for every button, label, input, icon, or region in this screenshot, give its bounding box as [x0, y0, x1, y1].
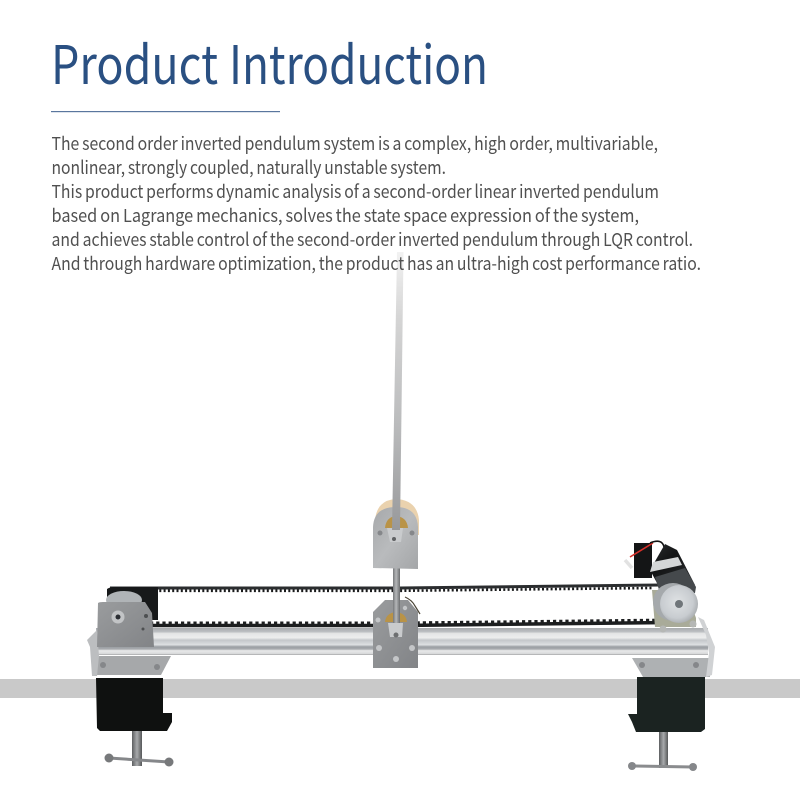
carriage wire	[405, 597, 420, 614]
introduction text block: And through hardware optimization, the product has an ultra-high cost performance ratio.	[52, 250, 701, 276]
introduction text block: This product performs dynamic analysis of a second-order linear inverted pendulum	[52, 178, 659, 204]
right mounting bracket	[632, 658, 710, 677]
rail right end cap	[698, 617, 715, 677]
title: Product	[51, 24, 218, 100]
introduction text block	[52, 130, 701, 276]
rail left end cap	[87, 630, 99, 676]
introduction text block: nonlinear, strongly coupled, naturally unstable system.	[52, 154, 446, 180]
left pulley	[106, 587, 158, 620]
lower belt run	[150, 620, 672, 626]
aluminium rail	[96, 628, 708, 655]
title underline	[51, 111, 280, 112]
upper pendulum rod	[392, 252, 404, 530]
cart carriage plate	[373, 598, 418, 668]
introduction text block: based on Lagrange mechanics, solves the state space expression of the system,	[52, 202, 639, 228]
title	[51, 24, 488, 100]
lower pendulum rod	[393, 566, 400, 606]
title: Introduction	[229, 24, 488, 100]
right bench clamp	[628, 677, 705, 771]
pendulum apparatus	[87, 252, 715, 771]
upper pendulum hinge plate	[373, 507, 418, 569]
left bench clamp	[96, 678, 174, 766]
top belt run	[110, 585, 662, 591]
introduction text block: The second order inverted pendulum system is a complex, high order, multivariable,	[52, 130, 658, 156]
left end plate	[97, 602, 154, 647]
table edge band	[0, 679, 800, 698]
left mounting bracket	[92, 656, 171, 675]
wood counterweight	[375, 499, 419, 535]
introduction text block: and achieves stable control of the second-order inverted pendulum through LQR control.	[52, 226, 693, 252]
motor assembly	[625, 541, 698, 632]
